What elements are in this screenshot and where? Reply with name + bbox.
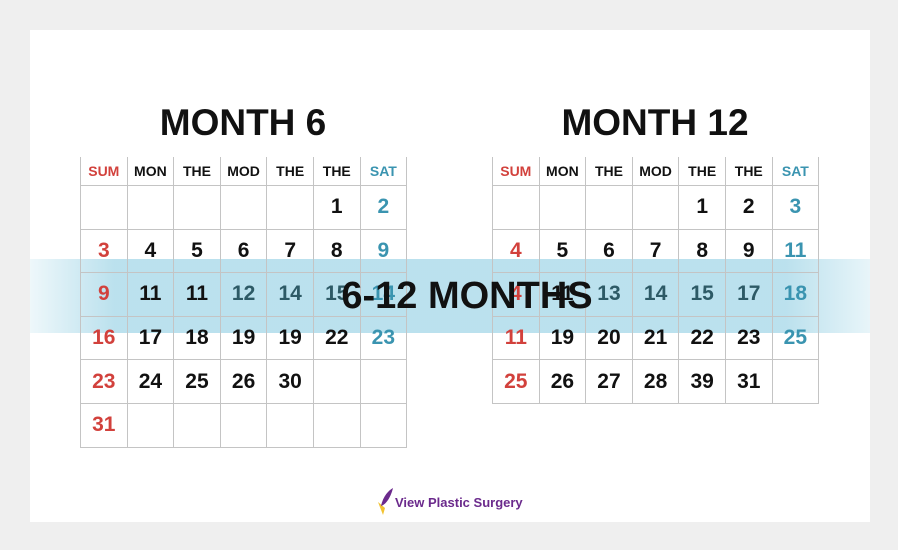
calendar: month 6: MOD: [227, 163, 260, 179]
calendar: month 6: 14: [372, 282, 395, 305]
calendar: month 12: 8: [696, 239, 708, 262]
calendar: month 12: SAT: [782, 163, 809, 179]
calendar: month 6: 19: [278, 326, 302, 349]
calendar: month 12: MON: [546, 163, 579, 179]
calendar: month 12: 31: [737, 370, 760, 393]
calendar: month 12: 22: [690, 326, 714, 349]
calendar: month 6: 4: [145, 239, 156, 262]
calendar: month 6: 3: [98, 239, 110, 262]
calendar: month 12: 14: [644, 282, 667, 305]
calendar: month 12: 3: [790, 195, 801, 218]
band label: 6-12 MONTHS: [341, 275, 593, 317]
calendar: month 6: 6: [238, 239, 249, 262]
calendar: month 12: 9: [743, 239, 755, 262]
calendar: month 6: 7: [284, 239, 296, 262]
calendar: month 6: 2: [378, 195, 389, 218]
calendar: month 12: 6: [603, 239, 615, 262]
calendar: month 12: 4: [510, 239, 522, 262]
calendar: month 12: THE: [595, 163, 623, 179]
calendar: month 6: 1: [331, 195, 343, 218]
calendar: month 12: MOD: [639, 163, 672, 179]
calendar: month 6: 31: [92, 413, 115, 436]
calendar: month 6: 18: [185, 326, 209, 349]
calendar: month 6: 11: [186, 282, 208, 305]
calendar: month 6: 14: [278, 282, 302, 305]
calendar: month 12: 15: [690, 282, 714, 305]
calendar: month 6: THE: [276, 163, 304, 179]
calendar: month 12: 11: [551, 282, 573, 305]
calendar: month 6: 9: [378, 239, 389, 262]
calendar: month 12: THE: [735, 163, 763, 179]
calendar: month 6: 26: [232, 370, 255, 393]
calendar: month 12: THE: [688, 163, 716, 179]
calendar: month 12: 13: [597, 282, 621, 305]
calendar: month 6: 25: [185, 370, 209, 393]
calendar: month 12: SUM: [500, 163, 531, 179]
calendar: month 6: 5: [191, 239, 203, 262]
calendar: month 6: MON: [134, 163, 167, 179]
calendar: month 12: 5: [557, 239, 568, 262]
logo: [378, 488, 523, 515]
calendar: month 12: 39: [690, 370, 714, 393]
calendar: month 6: SAT: [370, 163, 397, 179]
calendar: month 6: 11: [139, 282, 161, 305]
calendar: month 6: 24: [139, 370, 162, 393]
calendar: month 12: 17: [737, 282, 760, 305]
calendar: month 12: 26: [551, 370, 574, 393]
calendar: month 12: 4: [510, 282, 522, 305]
calendar: month 12: [492, 157, 819, 404]
calendar: month 12: 20: [597, 326, 621, 349]
calendar: month 12: 27: [597, 370, 621, 393]
calendar: month 12: 25: [504, 370, 527, 393]
calendar: month 12: 7: [650, 239, 661, 262]
calendar: month 12: 21: [644, 326, 667, 349]
calendar: month 12: 1: [696, 195, 708, 218]
calendar: month 6: SUM: [88, 163, 119, 179]
highlight band: [30, 259, 870, 333]
title: month 6: MONTH 6: [160, 102, 326, 143]
calendar: month 12: 28: [644, 370, 667, 393]
calendar: month 12: 19: [551, 326, 574, 349]
calendar: month 12: 11: [505, 326, 527, 349]
calendar: month 12: 23: [737, 326, 760, 349]
title: month 12: MONTH 12: [561, 102, 749, 143]
calendar: month 6: 23: [372, 326, 395, 349]
calendar: month 6: 16: [92, 326, 115, 349]
calendar: month 6: 22: [325, 326, 348, 349]
calendar: month 6: 9: [98, 282, 110, 305]
calendar: month 6: THE: [183, 163, 211, 179]
icon: feather: [378, 488, 393, 515]
calendar: month 6: 15: [325, 282, 348, 305]
brand text: View Plastic Surgery: [395, 495, 523, 510]
calendar: month 6: 19: [232, 326, 255, 349]
calendar: month 6: 23: [92, 370, 115, 393]
calendar: month 12: 11: [784, 239, 806, 262]
calendar: month 6: 8: [331, 239, 343, 262]
calendar: month 6: [80, 157, 407, 448]
calendar: month 12: 18: [784, 282, 807, 305]
calendar: month 6: 12: [232, 282, 255, 305]
calendar: month 12: 2: [743, 195, 755, 218]
calendar: month 12: 25: [784, 326, 807, 349]
calendar: month 6: 30: [278, 370, 302, 393]
calendar: month 6: 17: [139, 326, 162, 349]
calendar: month 6: THE: [323, 163, 351, 179]
